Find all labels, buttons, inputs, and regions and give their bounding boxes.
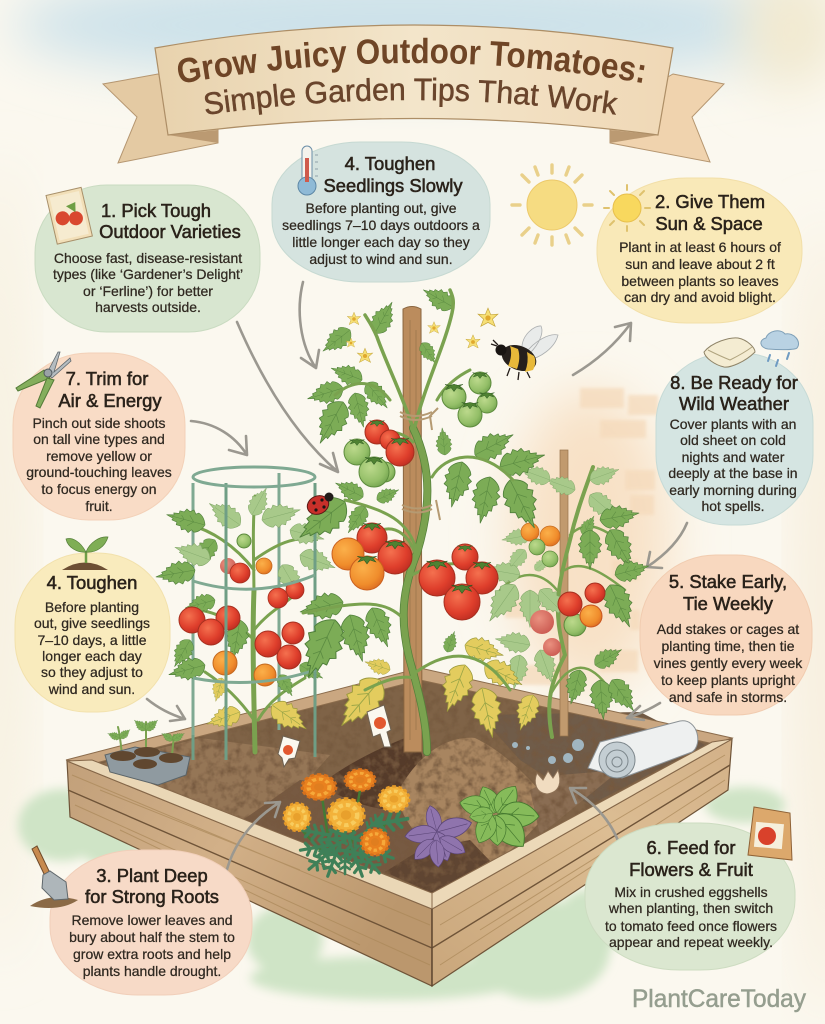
body text: nights and water [682, 449, 785, 465]
seedling tray [105, 717, 190, 785]
body text: types (like ‘Gardener’s Delight’ [53, 266, 243, 282]
icon: seedling [62, 537, 108, 570]
body text: Before planting [45, 599, 139, 615]
ribbon right tail [610, 74, 724, 162]
stems [404, 428, 427, 752]
arrow: feed to eggshell [570, 788, 622, 853]
body text: longer each day [42, 648, 142, 664]
icon: trowel [30, 846, 78, 908]
body text: fruit. [85, 498, 113, 514]
body text: 7–10 days, a little [38, 632, 147, 648]
body text: or ‘Ferline’) for better [83, 283, 213, 299]
leaves behind [290, 281, 549, 741]
arrow: toughen to seedlings [147, 699, 185, 721]
marigolds [284, 769, 409, 879]
heading line 2: Seedlings Slowly [323, 175, 463, 196]
arrow: tip 1 to central plant [237, 322, 338, 472]
stems [253, 590, 255, 752]
arrow: plant deep to soil [225, 802, 280, 877]
front left wall [67, 761, 432, 986]
arrows [147, 282, 687, 877]
body text: vines gently every week [654, 655, 803, 671]
panel: 6 Feed for Flowers and Fruit [585, 823, 795, 970]
lower right tomato cluster [419, 544, 498, 620]
body text [53, 250, 243, 315]
heading line 2: Flowers & Fruit [629, 859, 753, 880]
illustration: raised bed [66, 668, 732, 986]
lower left tomato cluster [332, 523, 412, 590]
illustration: left tomato plant in cage [154, 467, 339, 760]
body text: Cover plants with an [670, 416, 796, 432]
front rims [67, 760, 432, 909]
body text: hot spells. [701, 498, 765, 514]
arrow: weather to plant [647, 523, 687, 568]
heading: 8. Be Ready for [670, 372, 798, 393]
panel: 3 Plant Deep for Strong Roots [30, 846, 252, 995]
body text: harvests outside. [95, 299, 201, 315]
icon: pruners [16, 352, 71, 408]
body text: to keep plants upright [661, 672, 795, 688]
soil [88, 678, 712, 897]
heading: 3. Plant Deep [96, 865, 208, 886]
brick wall wash [505, 388, 670, 690]
rolled sheet [588, 721, 698, 778]
title line 1: Grow Juicy Outdoor Tomatoes: [178, 38, 645, 83]
body text: to focus energy on [41, 481, 157, 497]
illustration: central tomato plant [290, 281, 549, 752]
eggshell [535, 770, 560, 794]
panel: 4 Toughen [15, 537, 170, 712]
arrow: stake to right plant [627, 703, 660, 720]
heading: 7. Trim for [66, 368, 148, 389]
heading line 2: Wild Weather [679, 393, 789, 414]
arrow: seedlings to central plant [300, 282, 319, 368]
back left rim [66, 668, 420, 764]
ribbon folds [168, 130, 658, 143]
body text: on tall vine types and [33, 431, 165, 447]
ribbon main [155, 25, 673, 135]
heading line 2: Outdoor Varieties [99, 221, 241, 242]
heading: 4. Toughen [47, 572, 137, 593]
body text: planting time, then tie [661, 638, 795, 654]
calyxes [350, 373, 494, 593]
heading line 2: Tie Weekly [683, 593, 774, 614]
icon: seed packet [46, 187, 92, 244]
icon: folded sheet [704, 338, 755, 367]
body text: Plant in at least 6 hours of [619, 239, 781, 255]
grass [18, 787, 785, 1000]
body text: out, give seedlings [34, 615, 150, 631]
illustration: right tomato plant [479, 450, 652, 737]
body text [619, 239, 781, 305]
panel: 8 Be Ready for Wild Weather [656, 331, 813, 525]
plant labels [278, 705, 391, 767]
title line 2: Simple Garden Tips That Work [204, 78, 618, 115]
panel: 4 Toughen Seedlings Slowly [272, 142, 490, 282]
bumblebee [491, 326, 558, 380]
panel: 2 Give Them Sun and Space [597, 178, 802, 323]
icon: large sun [512, 165, 592, 245]
panel: 7 Trim for Air and Energy [13, 352, 185, 520]
icon: feed bag [748, 807, 792, 860]
body text: when planting, then switch [608, 900, 773, 916]
body text [26, 415, 172, 514]
body text: sun and leave about 2 ft [625, 256, 775, 272]
heading line 2: for Strong Roots [85, 886, 219, 907]
body text: wind and sun. [48, 681, 135, 697]
body text: Mix in crushed eggshells [614, 884, 768, 900]
heading: 2. Give Them [655, 191, 765, 212]
upper mixed tomato cluster [344, 420, 414, 487]
body text [34, 599, 150, 697]
body text: appear and repeat weekly. [609, 934, 773, 950]
body text: adjust to wind and sun. [309, 251, 453, 267]
body text [654, 621, 803, 705]
ribbon left tail [103, 74, 218, 163]
panel: 1 Pick Tough Outdoor Varieties [35, 185, 260, 332]
body text: ground-touching leaves [26, 464, 172, 480]
body text [69, 912, 235, 979]
heading: 6. Feed for [647, 837, 735, 858]
body text: so they adjust to [41, 664, 143, 680]
arrow: trim to cage [191, 421, 247, 455]
heading: 1. Pick Tough [101, 200, 211, 221]
panel: 5 Stake Early, Tie Weekly [640, 555, 812, 715]
banner ribbon [102, 24, 725, 164]
body text: Pinch out side shoots [32, 415, 166, 431]
body text: old sheet on cold [680, 432, 786, 448]
body text [605, 884, 777, 950]
body text: can dry and avoid blight. [624, 289, 776, 305]
icon: rain cloud [761, 331, 799, 366]
body text: Add stakes or cages at [657, 621, 799, 637]
front right wall [432, 739, 732, 986]
stake [403, 306, 422, 752]
body text [668, 416, 798, 514]
body text: and safe in storms. [669, 689, 787, 705]
logo: PlantCareToday: PlantCareToday [632, 985, 806, 1013]
arrow: sun to plants [573, 323, 631, 375]
body text: grow extra roots and help [73, 946, 231, 962]
feathery foliage [299, 810, 409, 879]
body text: plants handle drought. [83, 963, 221, 979]
stake [560, 450, 568, 736]
basil [404, 781, 540, 868]
flowers [346, 308, 498, 362]
body text [282, 200, 480, 267]
heading: 4. Toughen [345, 153, 435, 174]
body text: bury about half the stem to [69, 929, 235, 945]
cage front [193, 483, 315, 760]
body text: between plants so leaves [621, 273, 779, 289]
body text: deeply at the base in [668, 465, 798, 481]
cage back posts [193, 473, 279, 735]
body text: seedlings 7–10 days outdoors a [282, 217, 480, 233]
water puddles [512, 739, 584, 764]
body text: little longer each day so they [292, 234, 470, 250]
body text: remove yellow or [46, 448, 152, 464]
heading line 2: Sun & Space [655, 213, 763, 234]
tomatoes [237, 534, 251, 548]
ladybug [304, 492, 334, 518]
icon: thermometer [298, 146, 318, 195]
body text: early morning during [669, 482, 797, 498]
leaves [244, 484, 274, 519]
green tomato cluster [442, 372, 497, 427]
heading line 2: Air & Energy [58, 390, 162, 411]
ties [400, 408, 440, 520]
body text: Before planting out, give [306, 200, 457, 216]
body text: Remove lower leaves and [71, 912, 233, 928]
body text: to tomato feed once flowers [605, 918, 777, 934]
back right rim [420, 668, 732, 744]
body text: Choose fast, disease-resistant [54, 250, 242, 266]
icon: small sun [604, 185, 650, 231]
heading: 5. Stake Early, [669, 571, 787, 592]
